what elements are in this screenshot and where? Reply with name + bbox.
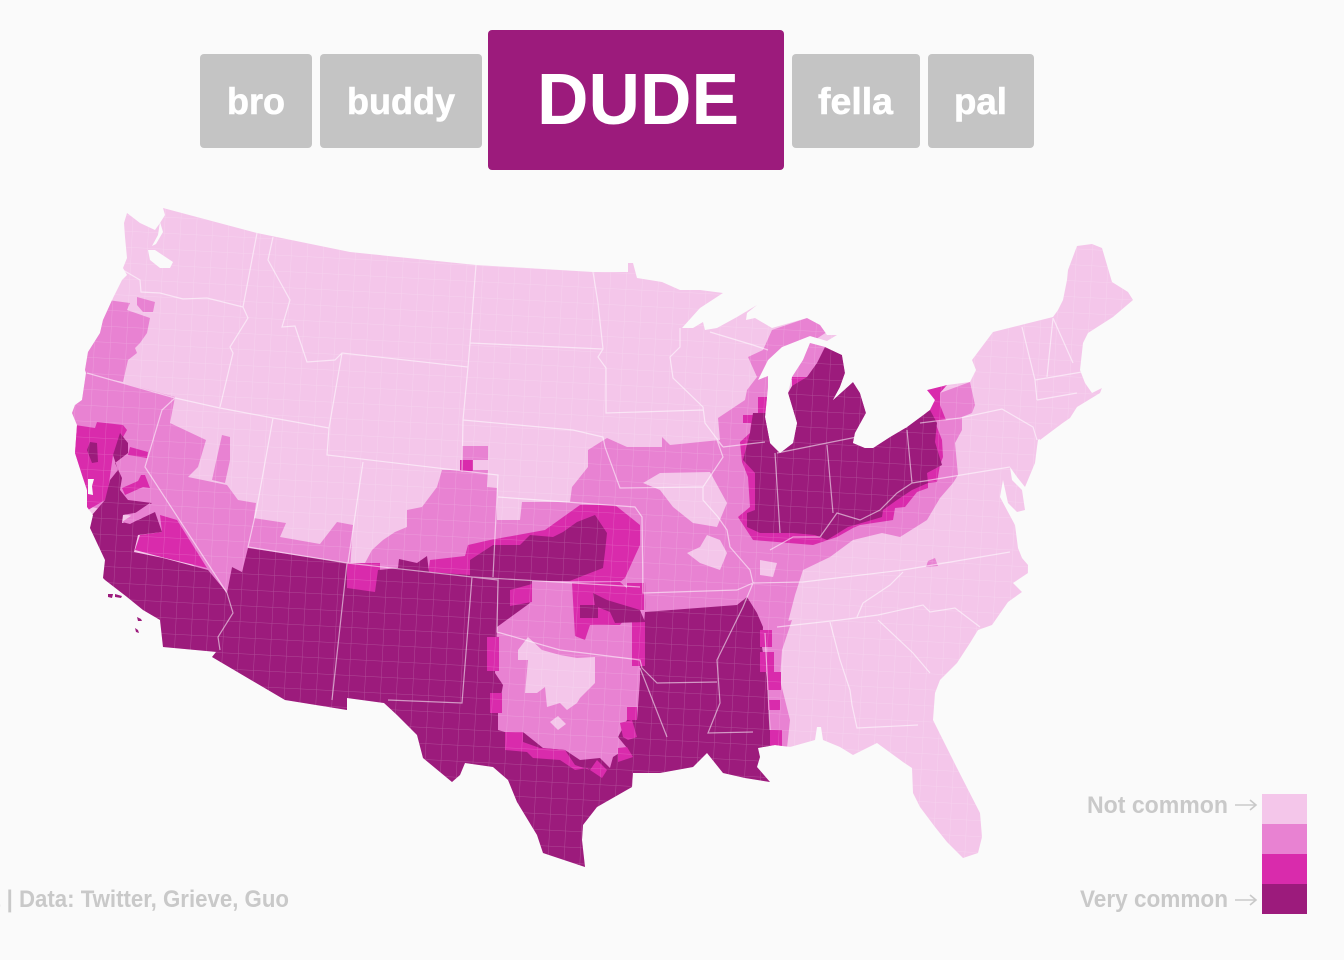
region: east Texas hot (620, 720, 637, 740)
inland water: Puget lowlands and Lake (148, 222, 173, 268)
region: hot county block in lower Michigan (792, 377, 807, 386)
region: Wisconsin hot counties (743, 397, 767, 423)
legend label: very common: Very common (1080, 886, 1228, 913)
button: pal (928, 54, 1034, 148)
button: fella (792, 54, 920, 148)
region: south Texas hot band (505, 732, 607, 778)
region: small low square in Texas (550, 716, 566, 730)
region: Alabama strip (760, 620, 792, 748)
region: California mid oval (122, 503, 153, 524)
word selector buttons (200, 30, 1034, 170)
region: Nebraska mid patch (462, 446, 488, 460)
button: buddy (320, 54, 482, 148)
region: far west moderately common (60, 373, 256, 600)
region: Kansas hot surroundings (428, 505, 640, 581)
legend swatch: common (1262, 854, 1307, 884)
region: Oklahoma hot (572, 582, 627, 640)
button: bro: bro (227, 81, 285, 122)
region: New Mexico hot (345, 563, 380, 593)
region: Virginia mid patch (926, 558, 938, 567)
region: east Texas upper hot (627, 707, 637, 720)
region: Mississippi edge hot squares (760, 630, 782, 746)
region: Oklahoma Texas low area (518, 637, 595, 710)
region: Midwest dark (743, 347, 942, 540)
legend swatch: somewhat common (1262, 824, 1307, 854)
region: not common base (50, 190, 1150, 890)
texture: county lines (50, 190, 1150, 890)
region: east Oklahoma hot strip (632, 622, 645, 666)
region: central Texas and Oklahoma moderately common (495, 581, 646, 768)
legend arrow: very common (1235, 895, 1256, 905)
region: Oregon inland patch (137, 297, 155, 312)
legend label: not common: Not common (1087, 792, 1228, 819)
region: Oklahoma dark block (580, 605, 598, 618)
legend swatch: very common (1262, 884, 1307, 914)
Long Island (1038, 416, 1070, 440)
button: bro (200, 54, 312, 148)
region: small Sierra hot patches (122, 475, 150, 495)
legend swatch: not common (1262, 794, 1307, 824)
region: Kansas border hot (510, 584, 532, 606)
region: Four Corners band (250, 518, 353, 563)
choropleth map of the United States (72, 208, 1133, 867)
region: Iowa low area (643, 472, 727, 527)
region: Panhandle hot strip (487, 637, 499, 671)
region: Missouri low area (687, 535, 727, 570)
button: fella: fella (818, 81, 893, 122)
region: Oklahoma dark patches (593, 593, 645, 623)
region: Coast Range dark patch (87, 442, 98, 463)
region: northeast Oklahoma hot (627, 583, 644, 610)
region: San Francisco Bay (88, 479, 94, 495)
source note: t | Data: Twitter, Grieve, Guo (0, 886, 289, 913)
region: lower Michigan mid patch (791, 343, 828, 380)
region: Midwest hot ring (738, 385, 947, 545)
button: DUDE selected: DUDE (537, 60, 739, 140)
button: buddy: buddy (347, 81, 455, 122)
state borders (87, 233, 1082, 737)
legend arrow: not common (1235, 800, 1256, 810)
region: central states moderately common (350, 318, 975, 640)
region: hot patch near Nebraska (460, 460, 473, 471)
button: DUDE selected (488, 30, 784, 170)
region: Sierra ridge (128, 447, 148, 458)
region: Oregon coast moderately common (80, 299, 150, 382)
Channel Islands (108, 594, 142, 633)
legend (1080, 792, 1307, 914)
region: Idaho Utah strip (212, 435, 230, 483)
region: Tennessee low patch (760, 560, 777, 577)
region: north California hot (72, 422, 127, 510)
button: pal: pal (954, 81, 1007, 122)
region: west Texas hot strip (490, 693, 502, 713)
region: east Texas lower hot (618, 747, 633, 762)
region: dark arc across the southwest and south (90, 433, 772, 867)
region: southern California hot (135, 515, 207, 568)
